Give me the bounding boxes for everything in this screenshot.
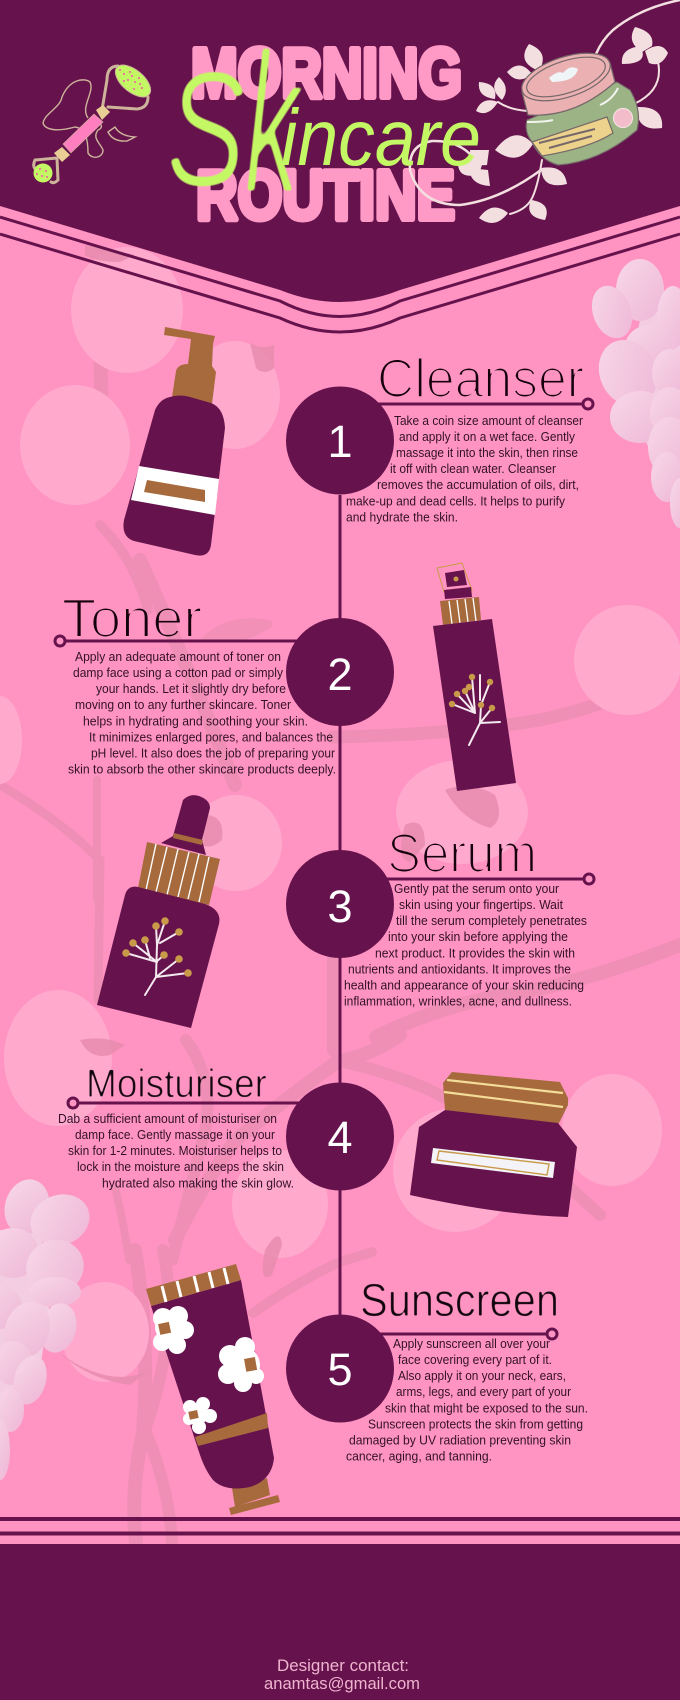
number circle (286, 1314, 394, 1422)
designer contact (264, 1657, 420, 1693)
number circle: 5 (327, 1344, 353, 1395)
body text: moving on to any further skincare. Toner (75, 698, 291, 712)
body text: It minimizes enlarged pores, and balances the (89, 730, 333, 744)
connector (360, 399, 593, 409)
icon: spray bottle (433, 563, 516, 791)
step 5: sunscreen (146, 1264, 588, 1515)
connector (375, 1329, 557, 1339)
heading: Serum (387, 822, 537, 884)
designer contact: Designer contact: (277, 1657, 409, 1675)
step 4: moisturiser (58, 1062, 577, 1217)
body text: lock in the moisture and keeps the skin (77, 1160, 284, 1174)
icon: dropper bottle (97, 795, 220, 1028)
left leaf cluster (0, 1174, 97, 1480)
icon: vine and leaves (410, 0, 680, 223)
body text: till the serum completely penetrates (396, 914, 587, 928)
body text: skin for 1-2 minutes. Moisturiser helps to (68, 1144, 282, 1158)
title: ROUTINE: ROUTINE (196, 156, 455, 234)
body text (68, 650, 336, 776)
body text: next product. It provides the skin with (375, 946, 575, 960)
body text: damaged by UV radiation preventing skin (349, 1434, 571, 1448)
timeline (338, 495, 342, 1320)
heading: Cleanser (377, 347, 584, 409)
body text: and hydrate the skin. (346, 510, 458, 524)
title: Skincare script (166, 12, 481, 235)
body text: into your skin before applying the (388, 930, 568, 944)
title: Skincare script: S (166, 37, 246, 221)
body text: massage it into the skin, then rinse (396, 446, 578, 460)
connector (55, 636, 306, 646)
body text (346, 1337, 588, 1464)
number circle (286, 850, 394, 958)
connector (68, 1098, 309, 1108)
step 1: cleanser (123, 327, 593, 556)
body text: nutrients and antioxidants. It improves the (348, 962, 571, 976)
body text: face covering every part of it. (398, 1353, 552, 1367)
body text: removes the accumulation of oils, dirt, (377, 478, 579, 492)
title: Skincare script: k (244, 12, 305, 235)
body text: it off with clean water. Cleanser (390, 462, 556, 476)
title: Skincare script: incare (281, 93, 481, 182)
heading: Sunscreen (360, 1274, 559, 1326)
icon: cream pot (410, 1072, 577, 1217)
body text: Apply sunscreen all over your (393, 1337, 550, 1351)
number circle (286, 618, 394, 726)
background: faint blossoms and branches (0, 245, 680, 1544)
icon: cream jar (516, 44, 638, 165)
body text: damp face. Gently massage it on your (75, 1128, 275, 1142)
right leaf cluster (585, 259, 680, 528)
body text: cancer, aging, and tanning. (346, 1450, 492, 1464)
icon: pump bottle (123, 327, 225, 556)
body text: and apply it on a wet face. Gently (399, 430, 576, 444)
heading: Moisturiser (86, 1062, 267, 1106)
body text: Take a coin size amount of cleanser (394, 414, 583, 428)
body text: pH level. It also does the job of preparing your (91, 746, 335, 760)
body text: skin that might be exposed to the sun. (385, 1402, 588, 1416)
designer contact: anamtas@gmail.com (264, 1675, 420, 1693)
body text: helps in hydrating and soothing your skin. (83, 714, 308, 728)
body text (58, 1112, 294, 1190)
body text: skin to absorb the other skincare products deeply. (68, 762, 336, 776)
title: MORNING: MORNING (191, 34, 462, 112)
icon: sunscreen tube (146, 1264, 280, 1515)
number circle (286, 1082, 394, 1190)
number circle: 2 (327, 649, 353, 700)
body text: health and appearance of your skin reducing (344, 978, 584, 992)
body text: your hands. Let it slightly dry before (96, 682, 286, 696)
step 3: serum (97, 795, 594, 1028)
body text: Dab a sufficient amount of moisturiser on (58, 1112, 277, 1126)
body text (344, 882, 587, 1008)
icon: face roller (34, 59, 156, 183)
footer band (0, 1517, 680, 1700)
connector (360, 874, 594, 884)
body text: Also apply it on your neck, ears, (398, 1369, 566, 1383)
header banner (0, 0, 680, 332)
body text: inflammation, wrinkles, acne, and dullness. (344, 994, 572, 1008)
number circle: 4 (327, 1112, 353, 1163)
number circle (286, 386, 394, 494)
body text: arms, legs, and every part of your (396, 1385, 571, 1399)
body text: damp face using a cotton pad or simply (73, 666, 284, 680)
body text: hydrated also making the skin glow. (102, 1176, 294, 1190)
step 2: toner (55, 563, 516, 791)
body text: Sunscreen protects the skin from getting (368, 1418, 583, 1432)
heading: Toner (62, 587, 202, 649)
body text: Apply an adequate amount of toner on (75, 650, 281, 664)
body text: skin using your fingertips. Wait (399, 898, 563, 912)
body text: Gently pat the serum onto your (394, 882, 559, 896)
number circle: 3 (327, 881, 353, 932)
number circle: 1 (327, 416, 353, 467)
body text: make-up and dead cells. It helps to purify (346, 494, 566, 508)
body text (346, 414, 583, 524)
